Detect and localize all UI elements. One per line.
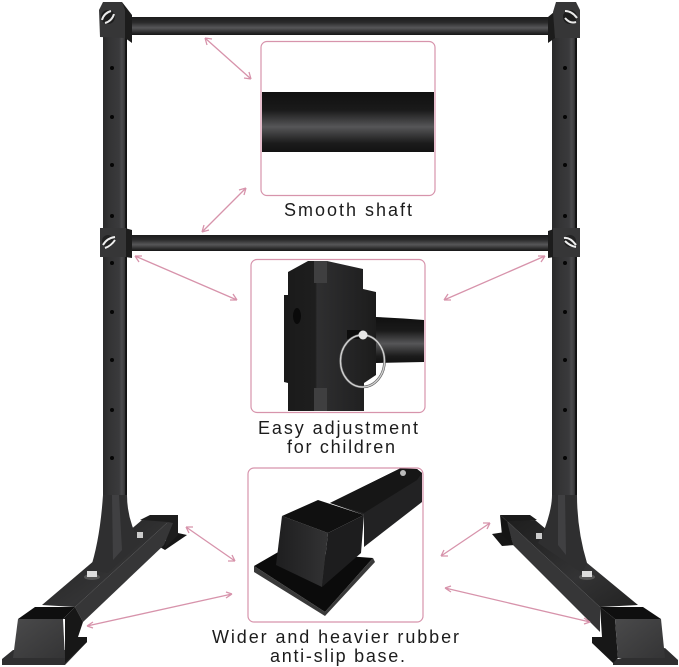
middle left bracket <box>100 228 132 258</box>
arrow: base far right <box>441 523 490 556</box>
rubber block <box>276 516 328 587</box>
tube close-up <box>376 317 424 363</box>
arrows <box>87 38 590 628</box>
panel: smooth shaft <box>261 42 435 196</box>
square tube close-up <box>330 468 422 547</box>
left base <box>2 495 187 665</box>
shaft close-up <box>262 92 434 152</box>
right post <box>552 30 577 530</box>
right base <box>492 495 678 665</box>
heading: rubber base: Wider and heavier rubber <box>212 627 459 647</box>
top left bracket <box>99 2 132 43</box>
bracket close-up <box>284 261 376 411</box>
heading: rubber base second line: anti-slip base. <box>270 646 405 666</box>
foot plate <box>254 551 373 612</box>
arrow: base near right <box>445 586 590 624</box>
pull ring <box>340 330 384 387</box>
panel: easy adjustment <box>251 260 425 412</box>
heading: smooth shaft: Smooth shaft <box>284 200 412 220</box>
top bar <box>128 17 554 35</box>
arrow: middle left <box>135 256 237 300</box>
heading: for children: for children <box>287 437 395 457</box>
panel: rubber base <box>248 468 423 622</box>
heading: easy adjustment: Easy adjustment <box>258 418 418 438</box>
bolt <box>400 470 406 476</box>
arrow: top left <box>205 38 251 79</box>
arrow: shaft lower <box>202 188 246 232</box>
arrow: base near left <box>87 592 232 628</box>
middle bar <box>128 235 554 251</box>
arrow: middle right <box>444 256 545 300</box>
arrow: base far left <box>186 527 235 561</box>
top right bracket <box>548 2 580 43</box>
left post <box>103 30 127 530</box>
middle right bracket <box>548 228 580 258</box>
